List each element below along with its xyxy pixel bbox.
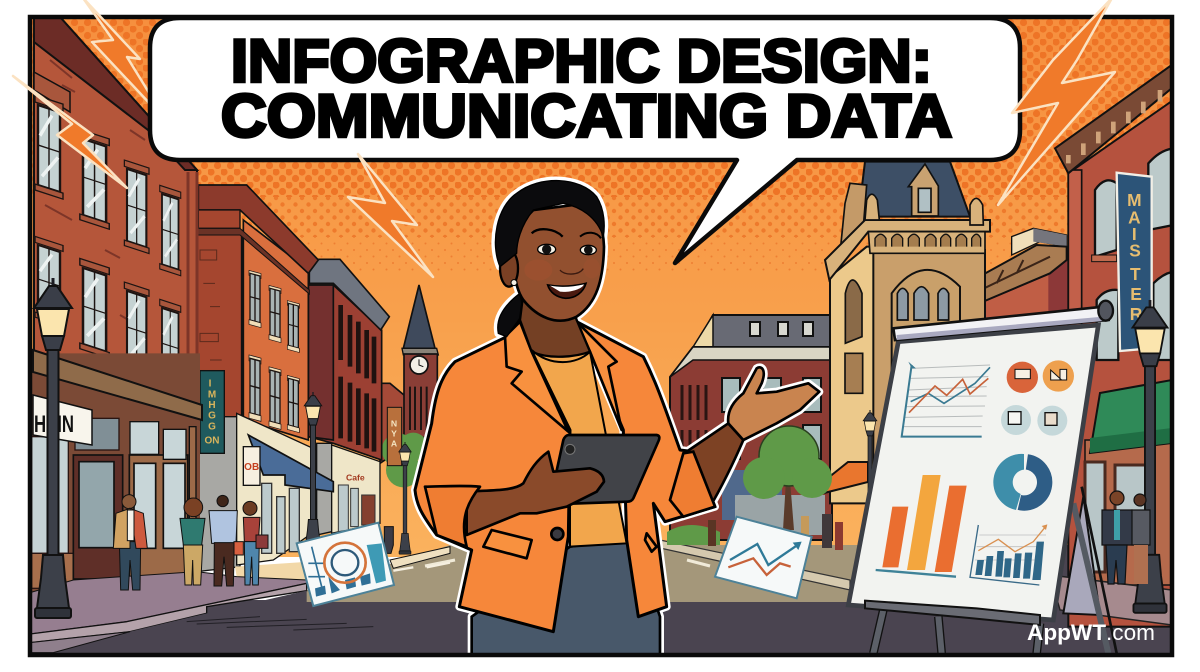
white sticker outline bbox=[415, 181, 819, 663]
street level shops center-left: Cafe bbox=[346, 473, 365, 483]
slate roof bbox=[858, 162, 970, 217]
road hatch marks bbox=[187, 617, 373, 630]
storefront left bbox=[30, 353, 200, 593]
street ground bbox=[30, 540, 1172, 656]
woman presenter bbox=[415, 181, 819, 663]
shirt bbox=[532, 350, 627, 547]
distant man bbox=[384, 527, 393, 553]
orange bar chart bbox=[876, 475, 967, 577]
teal blade sign: G bbox=[208, 421, 216, 432]
arched windows bbox=[890, 268, 961, 370]
lower windows bbox=[1097, 272, 1173, 360]
easel legs bbox=[873, 487, 1117, 653]
pedestrians left bbox=[113, 495, 393, 590]
clock tower and low buildings, left distance: A bbox=[391, 439, 398, 449]
arcade band bbox=[868, 232, 985, 253]
white blade sign bbox=[243, 447, 260, 485]
lower panel bbox=[32, 553, 74, 588]
street lamps bbox=[34, 278, 1167, 618]
blue awning bbox=[248, 435, 333, 492]
tree bbox=[743, 426, 832, 530]
man in tan jacket bbox=[113, 495, 147, 590]
arched window left bbox=[1095, 180, 1117, 257]
cornice bbox=[1055, 65, 1172, 173]
clock tower and low buildings, left distance: N bbox=[391, 419, 397, 429]
orange shop awning bbox=[824, 461, 868, 494]
building 2: orange brick bbox=[197, 185, 318, 440]
road edge bbox=[30, 591, 307, 653]
cream shop right bbox=[332, 445, 380, 533]
green-awning storefront bbox=[1085, 380, 1175, 585]
store banner: Maisters: S bbox=[1129, 241, 1141, 261]
teal blade sign: ON bbox=[205, 435, 219, 446]
watermark: AppWT.com bbox=[1027, 620, 1155, 645]
donut chart bbox=[993, 454, 1047, 510]
cornice bbox=[825, 220, 990, 280]
lightning bolt: right bbox=[998, 0, 1115, 205]
facade bbox=[1068, 100, 1173, 627]
shirt collar bbox=[532, 350, 590, 362]
dark door bbox=[73, 455, 123, 579]
tower left face bbox=[830, 247, 875, 503]
right cuff bbox=[670, 452, 715, 517]
store banner: Maisters: M bbox=[1127, 190, 1142, 210]
pedestrians right bbox=[1102, 491, 1150, 584]
hair bbox=[495, 181, 604, 267]
jacket right panel bbox=[577, 322, 715, 617]
store banner: Maisters: I bbox=[1132, 224, 1137, 244]
ponytail bbox=[498, 293, 523, 337]
left face arches bbox=[845, 280, 862, 343]
window right bbox=[1148, 148, 1173, 230]
paper roll bbox=[893, 301, 1113, 340]
sill bbox=[1092, 255, 1117, 262]
jacket lapels and pocket bbox=[483, 322, 657, 558]
finials bbox=[865, 194, 983, 225]
store banner: Maisters: E bbox=[1130, 284, 1142, 304]
upper glass dark bbox=[75, 418, 119, 450]
teal blade sign bbox=[200, 371, 224, 453]
tablet bbox=[550, 435, 659, 504]
street level shops center-left bbox=[197, 413, 380, 572]
icon circles bbox=[1001, 360, 1074, 436]
floating chart card: gauge and bars bbox=[297, 523, 394, 606]
flipchart easel bbox=[848, 301, 1117, 653]
store banner: Maisters bbox=[1117, 173, 1152, 351]
line chart bbox=[902, 362, 990, 437]
store banner: Maisters: R bbox=[1130, 304, 1143, 324]
lightning bolt: center bbox=[348, 154, 433, 277]
double doors bbox=[129, 455, 188, 577]
side dormer bbox=[841, 183, 867, 247]
left cuff bbox=[425, 486, 480, 547]
mini bar and line chart bbox=[970, 524, 1047, 585]
speech bubble bbox=[150, 18, 1020, 263]
street level shops center-left: OB bbox=[244, 462, 259, 473]
clock tower and low buildings, left distance: Y bbox=[391, 429, 397, 439]
right forearm bbox=[687, 423, 743, 507]
grey corner bbox=[317, 443, 332, 535]
head bbox=[514, 203, 604, 321]
teal blade sign: G bbox=[208, 411, 216, 422]
brick building right bbox=[1055, 65, 1173, 627]
tray bbox=[865, 601, 1040, 625]
store banner: Maisters: T bbox=[1130, 264, 1141, 284]
far sidewalk bbox=[390, 547, 450, 568]
distant pedestrians bbox=[708, 514, 843, 550]
grey-roof brick block bbox=[667, 315, 832, 545]
left street and sidewalk bbox=[30, 547, 450, 653]
lightning bolt: left bbox=[13, 76, 127, 188]
teal blade sign: I bbox=[209, 379, 212, 390]
mid brick block behind flipchart bbox=[986, 228, 1068, 327]
sky with halftone bbox=[30, 17, 1172, 557]
flipchart board bbox=[848, 325, 1098, 620]
left forearm and hand bbox=[467, 452, 604, 535]
building 3: maroon bbox=[308, 259, 389, 460]
woman in teal top bbox=[180, 498, 205, 585]
left glass bbox=[32, 437, 68, 553]
lightning bolt: top left bbox=[83, 0, 167, 122]
stone tower bbox=[825, 162, 990, 503]
ear and earring bbox=[500, 250, 518, 287]
store banner: Maisters: A bbox=[1128, 207, 1141, 227]
crosswalk bbox=[393, 563, 450, 571]
building 1: large brick bbox=[34, 17, 197, 420]
dormer window bbox=[908, 164, 938, 216]
store cornice bbox=[33, 350, 202, 420]
jacket left panel bbox=[415, 320, 570, 632]
neck bbox=[520, 293, 590, 357]
pilaster bbox=[1069, 169, 1082, 324]
title bbox=[221, 28, 952, 150]
man in blue shirt bbox=[209, 495, 237, 586]
cornice brackets bbox=[1068, 90, 1160, 163]
grey wall bbox=[197, 417, 240, 572]
floating chart card: line chart bbox=[715, 517, 812, 598]
teal blade sign: H bbox=[208, 400, 216, 411]
pants bbox=[472, 537, 660, 663]
woman in red top bbox=[234, 501, 268, 585]
face details bbox=[524, 229, 601, 298]
curb bbox=[30, 583, 307, 643]
title: COMMUNICATING DATA bbox=[221, 82, 952, 150]
store sign: HEIN bbox=[34, 411, 74, 438]
store sign bbox=[33, 395, 92, 445]
transoms bbox=[130, 422, 159, 454]
cream shop bbox=[237, 413, 317, 565]
clock tower and low buildings, left distance bbox=[380, 285, 438, 487]
sidewalk right bbox=[1050, 575, 1172, 625]
lit pavement bbox=[235, 562, 310, 580]
title: INFOGRAPHIC DESIGN: bbox=[231, 28, 932, 94]
sidewalk bbox=[30, 572, 307, 634]
tower front face bbox=[872, 249, 986, 467]
bottom left strip bbox=[30, 632, 130, 653]
open hand bbox=[728, 367, 819, 440]
teal blade sign: M bbox=[208, 389, 216, 400]
shop door and window bbox=[262, 483, 299, 553]
